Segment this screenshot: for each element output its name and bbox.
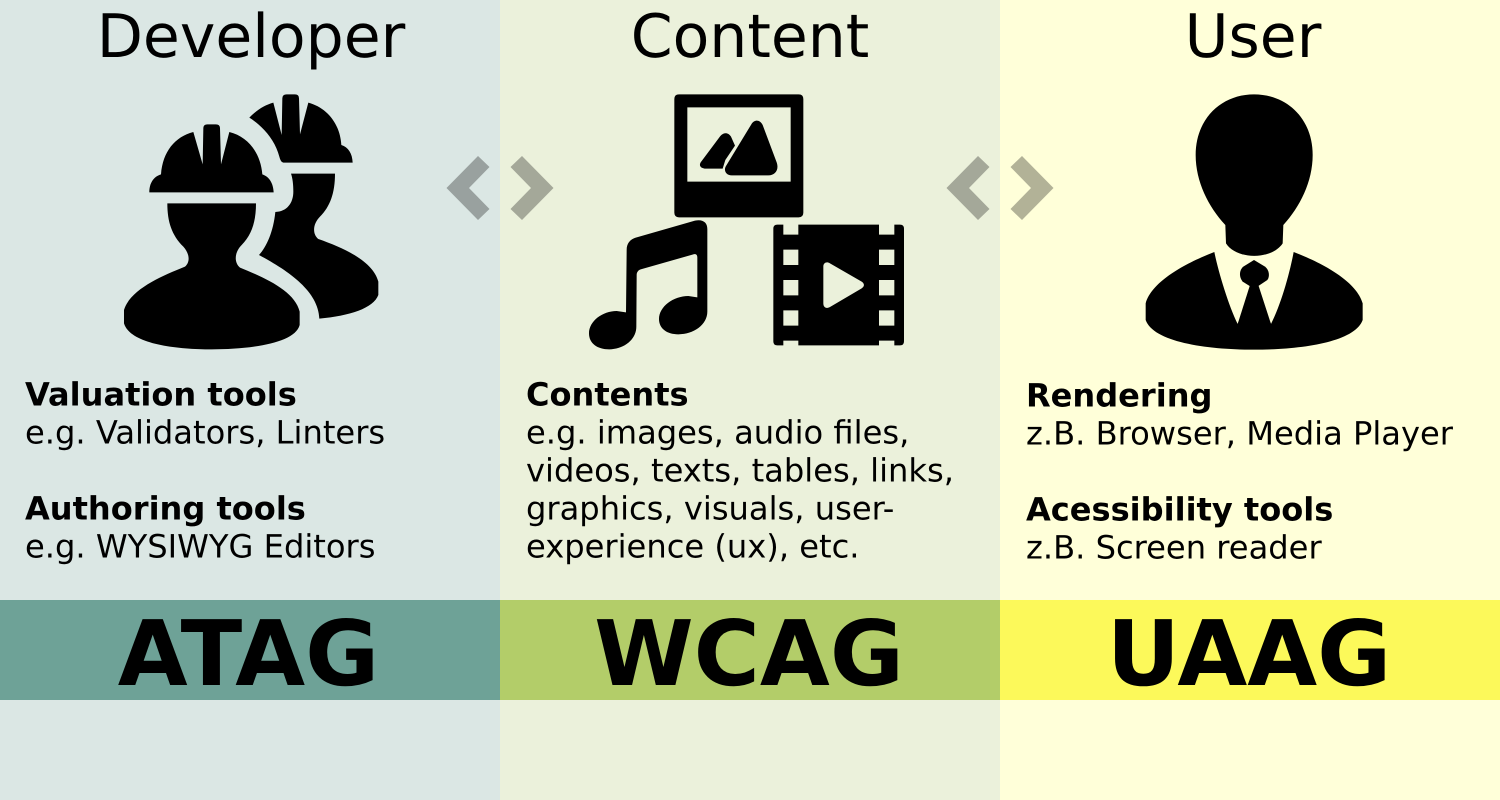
band: ATAG <box>0 600 500 707</box>
text: developer tools: e.g. Validators, Linters <box>25 413 385 451</box>
heading: user: User <box>1185 2 1322 72</box>
text: developer tools: e.g. WYSIWYG Editors <box>25 527 376 565</box>
icon: media files <box>589 94 904 349</box>
text: user tools: z.B. Screen reader <box>1026 528 1322 566</box>
band: UAAG <box>1000 600 1500 707</box>
text: developer tools: Valuation tools <box>25 375 297 413</box>
text: content description: experience (ux), etc. <box>526 527 860 565</box>
band: ATAG: ATAG <box>118 602 379 707</box>
text: developer tools <box>25 375 385 565</box>
panel: user <box>1000 0 1500 800</box>
band: WCAG: WCAG <box>594 602 904 707</box>
icon: business person <box>1146 94 1363 350</box>
heading: content: Content <box>631 2 869 72</box>
panel: content <box>500 0 1000 800</box>
text: user tools: z.B. Browser, Media Player <box>1026 414 1454 452</box>
text: content description: e.g. images, audio files, <box>526 413 909 451</box>
text: developer tools: Authoring tools <box>25 489 306 527</box>
heading: developer: Developer <box>97 2 406 72</box>
icon: construction workers <box>124 94 378 349</box>
text: content description: Contents <box>526 375 689 413</box>
band: UAAG: UAAG <box>1107 602 1391 707</box>
text: content description <box>526 375 954 565</box>
panel: developer <box>0 0 500 800</box>
text: user tools <box>1026 376 1454 566</box>
text: content description: videos, texts, tables, links, <box>526 451 954 489</box>
text: user tools: Rendering <box>1026 376 1212 414</box>
text: content description: graphics, visuals, user- <box>526 489 894 527</box>
text: user tools: Acessibility tools <box>1026 490 1333 528</box>
band: WCAG <box>500 600 1000 707</box>
arrow: content user exchange <box>946 156 1054 220</box>
arrow: developer content exchange <box>446 156 554 220</box>
